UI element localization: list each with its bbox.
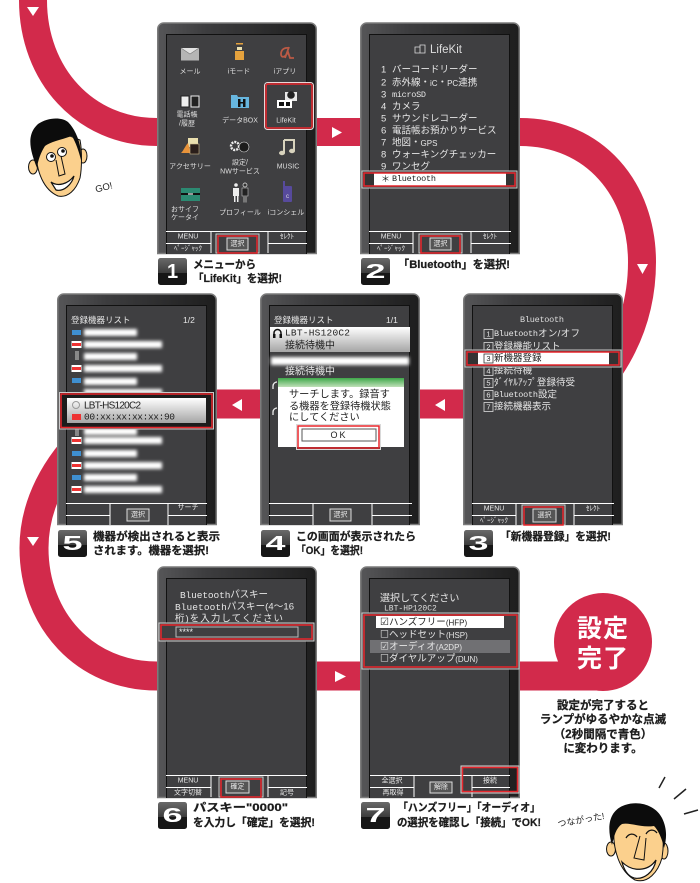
soft keys [269, 503, 412, 525]
prompt: LBT-HP120C2 [384, 604, 437, 614]
menu list: 7 [381, 138, 386, 148]
menu list: 5 [381, 114, 386, 124]
menu list: 4 [486, 366, 491, 376]
soft keys: ｾﾚｸﾄ [280, 232, 294, 240]
step 6 caption: 6 [162, 805, 182, 827]
menu list: サウンドレコーダー [392, 112, 478, 124]
red flow band: step 3 to 5 [34, 404, 623, 676]
step 5 caption: 5 [62, 533, 82, 555]
soft keys: 選択 [131, 510, 145, 518]
step 4 caption [261, 529, 416, 557]
menu labels: ケータイ [171, 212, 199, 222]
completion bubble [520, 593, 652, 691]
prompt [380, 592, 459, 614]
menu list: 2 [486, 342, 491, 352]
connected device row [270, 327, 410, 352]
menu list: バーコードリーダー [392, 64, 478, 76]
soft keys [369, 231, 511, 253]
menu list: 3 [381, 90, 386, 100]
highlight: Bluetooth [362, 171, 517, 188]
icon: accessory [181, 138, 199, 154]
step 5 caption [58, 529, 220, 557]
highlight: profile options: ☑ [380, 642, 389, 652]
step 2 caption [361, 257, 510, 285]
soft keys: 選択 [334, 510, 348, 518]
completion bubble: 完了 [577, 645, 629, 673]
menu list: 2 [381, 78, 386, 88]
soft keys: ﾍﾟｰｼﾞｬｯｸ [377, 244, 405, 252]
soft keys: MENU [484, 506, 504, 512]
step 6 caption: を入力し「確定」を選択! [193, 815, 315, 829]
menu list: 接続待機 [494, 364, 533, 376]
menu list: 1 [381, 64, 386, 76]
soft keys: ｾﾚｸﾄ [586, 504, 600, 512]
step 6 caption: パスキー"0000" [193, 801, 288, 814]
menu list: 1 [486, 330, 491, 338]
icon: concier: c [286, 194, 289, 200]
completion note [540, 698, 667, 755]
soft keys: MENU [381, 234, 401, 240]
menu list: 登録機能リスト [494, 340, 561, 352]
highlight: Bluetooth: ＊ [381, 174, 390, 184]
passkey instructions: Bluetoothパスキー(4～16 [175, 602, 294, 612]
phone 3: Bluetooth menu [464, 294, 622, 525]
menu list: 5 [486, 378, 491, 388]
highlight: profile options: ☑ [380, 617, 389, 628]
menu list: 電話帳お預かりサービス [392, 124, 497, 136]
completion bubble: 設定 [577, 615, 629, 643]
blurred device row [271, 357, 409, 365]
completion note: ランプがゆるやかな点滅 [540, 712, 667, 726]
menu list: 設定 [538, 390, 558, 400]
soft keys: ｾﾚｸﾄ [483, 232, 497, 240]
step 3 caption: 「新機器登録」を選択! [500, 529, 611, 543]
menu list: 7 [486, 402, 491, 412]
menu list: Bluetooth [494, 329, 538, 339]
phone 2: LifeKit list [361, 23, 519, 254]
dialog: サーチします。録音す [289, 388, 390, 400]
character: happy face [606, 803, 668, 881]
menu labels: メール [180, 68, 200, 76]
phone 1: menu [158, 23, 316, 254]
emphasis rays [659, 777, 698, 814]
menu list: ウォーキングチェッカー [392, 148, 496, 160]
menu list: microSD [392, 90, 426, 100]
screen header: 1/1 [386, 315, 398, 325]
menu labels: iアプリ [274, 68, 296, 76]
menu labels: NWサービス [220, 166, 260, 176]
step 7 caption: 「ハンズフリー」「オーディオ」 [398, 800, 540, 814]
arrow: left 4 to 5 [232, 399, 242, 411]
soft keys [370, 775, 510, 797]
menu labels: アクセサリー [169, 162, 211, 170]
menu labels [169, 68, 304, 222]
soft keys [166, 231, 307, 253]
screen header [71, 315, 195, 325]
soft keys: 解除 [434, 782, 448, 791]
arrow: start down [27, 7, 39, 16]
headset icons behind dialog [273, 382, 277, 415]
passkey instructions: 桁)を入力してください [175, 612, 283, 624]
soft keys [472, 503, 614, 525]
soft keys: MENU [178, 234, 198, 240]
menu list: 地図・GPS [392, 136, 437, 148]
menu list [484, 328, 580, 412]
soft keys: 再取得 [382, 788, 404, 796]
GO label: GO! [94, 180, 114, 196]
step 1 caption: 「LifeKit」を選択! [193, 271, 282, 285]
menu list: 8 [381, 150, 386, 160]
passkey instructions: Bluetoothパスキー [180, 590, 268, 600]
menu list: 4 [381, 102, 386, 112]
highlight: profile options: ヘッドセット(HSP) [389, 630, 468, 640]
menu list: ﾀﾞｲﾔﾙｱｯﾌﾟ登録待受 [494, 376, 575, 388]
arrow: down 2 to 3 [637, 264, 648, 274]
icon: settings [231, 142, 249, 152]
select button [522, 505, 565, 525]
soft keys: ﾍﾟｰｼﾞｬｯｸ [174, 244, 202, 252]
icon: mail [181, 48, 199, 60]
step 4 caption: 「OK」を選択! [296, 543, 363, 557]
blurred device rows [84, 329, 162, 493]
phone 5: device list [58, 294, 216, 525]
menu list: 6 [381, 126, 386, 136]
highlight: Bluetooth: Bluetooth [392, 174, 436, 184]
select button [419, 234, 462, 253]
screen header: 1/2 [183, 315, 195, 325]
connected device row: LBT-HS120C2 [285, 328, 350, 338]
menu labels: おサイフ [171, 206, 199, 214]
menu list: 9 [381, 162, 386, 172]
completion note: に変わります。 [563, 741, 643, 755]
screen header: 登録機器リスト [274, 315, 334, 325]
music note heads [279, 149, 295, 155]
arrow: left 3 to 4 [435, 399, 445, 411]
soft keys [166, 775, 307, 797]
dialog: にしてください [289, 412, 360, 424]
phone 4: registered list [261, 294, 419, 525]
highlight: profile options: ハンズフリー(HFP) [389, 616, 467, 628]
phone 7: profile select [361, 567, 519, 798]
soft keys: 接続 [483, 776, 497, 784]
passkey instructions [175, 590, 294, 624]
soft keys: 全選択 [382, 776, 402, 784]
soft keys: MENU [178, 778, 198, 784]
soft keys [66, 503, 207, 525]
highlight: LifeKit [264, 82, 314, 130]
screen header [274, 315, 398, 325]
screen header: 登録機器リスト [71, 315, 131, 325]
screen title [415, 44, 463, 56]
step 5 caption: 機器が検出されると表示 [93, 529, 220, 543]
menu labels: MUSIC [277, 164, 299, 170]
select button: 選択 [434, 238, 448, 248]
character: GO face [28, 118, 87, 196]
icon: i-appli [281, 47, 294, 58]
phone 6: passkey [158, 567, 316, 798]
highlight: connect [461, 766, 519, 793]
select button: 選択 [538, 510, 552, 519]
menu list [381, 64, 497, 172]
step 7 caption [361, 800, 541, 829]
prompt: 選択してください [380, 592, 459, 604]
arrow: down 5 to 6 [27, 537, 39, 546]
screen title: Bluetooth [520, 315, 564, 325]
device type icons [72, 330, 82, 493]
highlight: profile options: ☐ [380, 654, 389, 664]
red flow band: step 1 to 2 to 3 [33, 0, 642, 368]
menu list: 接続機器表示 [494, 400, 551, 412]
menu list: 6 [486, 390, 491, 400]
highlight: profile options: ☐ [380, 630, 389, 640]
icon: phonebook [181, 96, 199, 107]
menu list: ワンセグ [392, 160, 431, 172]
icon: profile [233, 183, 248, 202]
icon: i-mode [235, 43, 244, 60]
icon: music [284, 140, 294, 153]
step 7 caption: の選択を確認し「接続」でOK! [397, 815, 541, 829]
menu list: カメラ [392, 102, 421, 112]
arrow: right 6 to 7 [335, 671, 346, 682]
highlight: LBT-HS120C2: LBT-HS120C2 [84, 400, 141, 412]
confirm button: 確定 [230, 782, 244, 790]
connected device row: 接続待機中 [285, 338, 335, 352]
menu labels: 電話帳 [176, 110, 198, 118]
step 7 caption: 7 [366, 805, 386, 827]
menu list: オン/オフ [538, 328, 580, 340]
icon: data box [231, 95, 249, 108]
menu labels: 設定/ [232, 158, 248, 166]
menu labels: プロフィール [219, 208, 261, 216]
menu list: 赤外線・iC・PC連携 [392, 76, 478, 88]
icon: wallet [181, 188, 200, 201]
icon: concier [283, 181, 292, 202]
highlight: LifeKit: LifeKit [276, 118, 296, 124]
menu labels: データBOX [222, 116, 258, 124]
waiting text: 接続待機中 [285, 364, 335, 378]
highlight: new device: 3 [486, 354, 491, 363]
select button: 選択 [230, 238, 244, 248]
screen title: LifeKit [430, 44, 463, 56]
highlight: passkey field: **** [179, 627, 194, 637]
menu labels: iモード [228, 68, 250, 76]
step 1 caption: メニューから [193, 258, 256, 271]
completion note: 設定が完了すると [557, 698, 649, 712]
connected label: つながった! [557, 810, 605, 829]
menu labels: iコンシェル [268, 208, 304, 216]
highlight: profile options [362, 613, 519, 669]
highlight: new device [465, 350, 621, 367]
menu list: Bluetooth [494, 390, 538, 400]
soft keys: 記号 [280, 788, 294, 796]
dialog [278, 378, 404, 450]
step 4 caption: この画面が表示されたら [296, 529, 416, 543]
soft keys: サーチ [178, 504, 198, 512]
step 3 caption [464, 529, 611, 557]
highlight: profile options: オーディオ(A2DP) [389, 640, 462, 652]
soft keys: 文字切替 [174, 788, 202, 796]
step 6 caption [158, 801, 315, 829]
highlight: LBT-HS120C2 [60, 392, 214, 429]
step 2 caption: 「Bluetooth」を選択! [398, 257, 510, 271]
step 5 caption: されます。機器を選択! [93, 543, 209, 557]
completion note: （2秒間隔で青色） [554, 727, 652, 741]
dialog: OK [330, 430, 348, 440]
dialog: る機器を登録待機状態 [289, 400, 391, 412]
menu labels: /履歴 [179, 120, 195, 128]
confirm button [219, 777, 263, 797]
step 1 caption [158, 258, 282, 285]
step 3 caption: 3 [468, 533, 488, 555]
highlight: LBT-HS120C2: 00:xx:xx:xx:xx:90 [84, 412, 175, 422]
highlight: profile options: ダイヤルアップ(DUN) [389, 652, 478, 664]
arrow: right 1 to 2 [332, 127, 342, 138]
soft keys: ﾍﾟｰｼﾞｬｯｸ [480, 516, 508, 524]
step 1 caption: 1 [167, 261, 178, 283]
step 4 caption: 4 [266, 533, 287, 555]
highlight: passkey field [159, 623, 314, 641]
highlight: new device: 新機器登録 [494, 352, 542, 364]
step 2 caption: 2 [366, 261, 386, 283]
select button [216, 234, 259, 253]
